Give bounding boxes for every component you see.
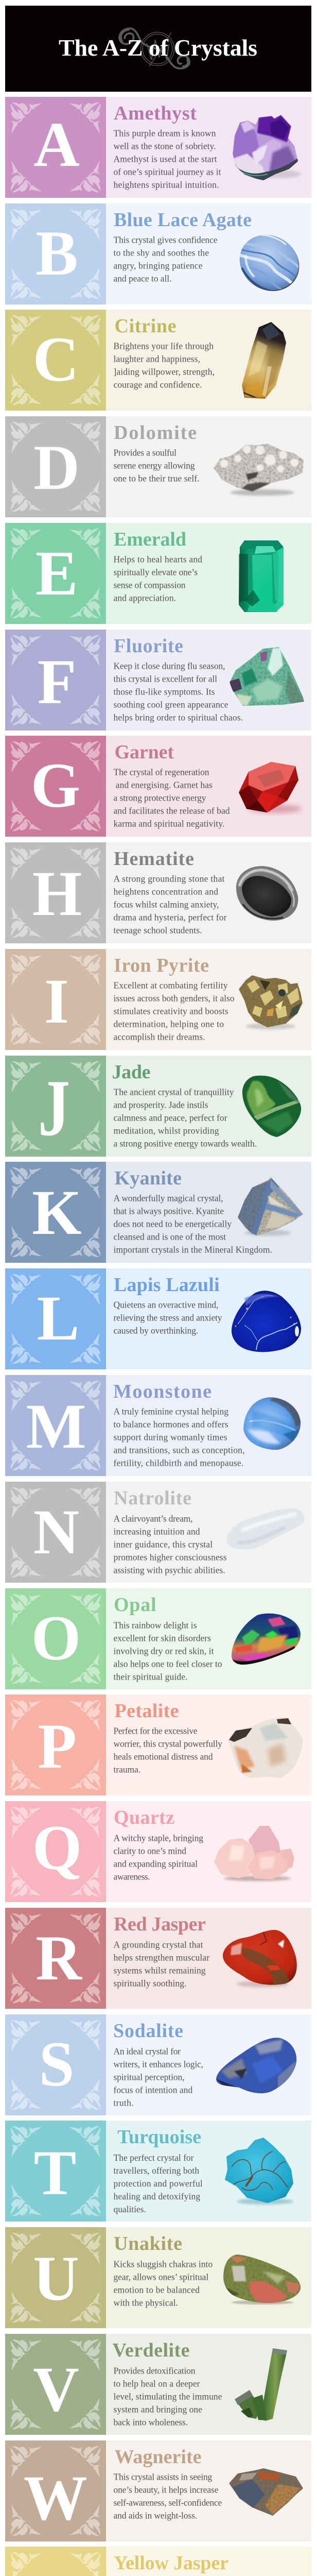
description: Excellent at combating fertility <box>113 980 228 990</box>
card: Turquoise <box>5 2121 311 2222</box>
description: ]aiding willpower, strength, <box>113 367 215 377</box>
description: serene energy allowing <box>113 461 195 471</box>
ornament corners <box>11 635 100 725</box>
letter K: K <box>32 1177 82 1248</box>
crystal name: Lapis Lazuli <box>114 1274 219 1296</box>
card: Wagnerite <box>5 2441 311 2541</box>
card: Emerald <box>5 523 311 624</box>
description: Kicks sluggish chakras into <box>113 2259 213 2269</box>
letter O: O <box>31 1603 81 1673</box>
description: gear, allows ones’ spiritual <box>113 2272 208 2282</box>
ornament corners <box>11 2446 100 2536</box>
description <box>113 1193 272 1255</box>
description: writers, it enhances logic, <box>113 2059 203 2069</box>
letter U: U <box>33 2243 79 2314</box>
ornament corners <box>11 1274 100 1364</box>
description: courage and confidence. <box>113 379 202 389</box>
description: those flu-like symptoms. Its <box>113 686 215 697</box>
crystal name: Petalite <box>114 1700 179 1722</box>
description <box>113 128 221 190</box>
icon: blue lace agate <box>240 235 300 291</box>
description: karma and spiritual negativity. <box>113 818 224 828</box>
description <box>113 1406 245 1468</box>
card: Verdelite <box>5 2334 311 2435</box>
description: calmness and peace, perfect for <box>113 1113 227 1123</box>
card: Lapis Lazuli <box>5 1268 311 1369</box>
description: cleansed and is one of the most <box>113 1231 226 1242</box>
description: healing and detoxifying <box>113 2191 200 2201</box>
description: trauma. <box>113 1764 140 1774</box>
ornament corners <box>11 2126 100 2216</box>
description: sense of compassion <box>113 580 186 590</box>
description: well as the stone of sobriety. <box>113 141 216 151</box>
ornament corners <box>11 2340 100 2429</box>
description: determination, helping one to <box>113 1019 224 1029</box>
description <box>113 2259 213 2308</box>
description: support during womanly times <box>113 1432 227 1443</box>
description: worrier, this crystal powerfully <box>113 1738 222 1749</box>
letter R: R <box>36 1923 82 1993</box>
description: A witchy staple, bringing <box>113 1833 203 1843</box>
card: Natrolite <box>5 1482 311 1583</box>
crystal name: Opal <box>114 1594 156 1616</box>
letter C: C <box>33 324 79 395</box>
description: A truly feminine crystal helping <box>113 1406 228 1417</box>
icon: verdelite crystals <box>235 2348 287 2421</box>
header logo watermark <box>119 28 189 69</box>
description: protection and powerful <box>113 2178 203 2189</box>
crystal name: Quartz <box>114 1807 174 1828</box>
description: Perfect for the excessive <box>113 1726 198 1736</box>
description <box>113 2472 222 2520</box>
ornament corners <box>11 1913 100 2003</box>
description: clarity to one’s mind <box>113 1845 186 1856</box>
icon: jade stone <box>242 1076 301 1137</box>
icon: amethyst cluster <box>233 115 301 182</box>
letter M: M <box>26 1391 86 1462</box>
description: to the shy and soothes the <box>113 247 209 258</box>
description: and transitions, such as conception, <box>113 1445 245 1455</box>
description: heals emotional distress and <box>113 1752 213 1762</box>
letter J: J <box>38 1063 70 1153</box>
card: Fluorite <box>5 630 311 731</box>
description <box>113 1087 257 1149</box>
description <box>113 1939 209 1989</box>
description: level, stimulating the immune <box>113 2392 222 2402</box>
ornament corners <box>11 1807 100 1896</box>
description: accomplish their dreams. <box>113 1031 205 1042</box>
description: caused by overthinking. <box>113 1325 198 1335</box>
icon: petalite rock <box>228 1717 303 1778</box>
card: Hematite <box>5 842 311 943</box>
description: important crystals in the Mineral Kingdom. <box>113 1245 272 1255</box>
card: Jade <box>5 1056 311 1157</box>
description <box>113 2366 222 2428</box>
crystal name: Fluorite <box>114 635 183 657</box>
icon: citrine crystal <box>242 322 286 399</box>
description: a strong positive energy towards wealth. <box>113 1139 257 1149</box>
description: back into wholeness. <box>113 2417 188 2428</box>
crystal name: Iron Pyrite <box>114 955 209 976</box>
description <box>113 980 235 1042</box>
ornament corners <box>11 2233 100 2323</box>
description: spiritually soothing. <box>113 1978 186 1989</box>
crystal name: Natrolite <box>114 1487 191 1509</box>
crystal name: Kyanite <box>114 1167 182 1189</box>
description: meditation, whilst providing <box>113 1125 219 1136</box>
description: of one’s spiritual journey as it <box>113 167 221 177</box>
description: helps strengthen muscular <box>113 1953 209 1963</box>
ornament corners <box>11 2020 100 2110</box>
ornament corners <box>11 315 100 405</box>
description: drama and hysteria, perfect for <box>113 912 227 922</box>
ornament corners <box>11 741 100 831</box>
description: and energising. Garnet has <box>116 780 213 790</box>
card: Red Jasper <box>5 1908 311 2009</box>
description <box>113 1514 227 1575</box>
description: one to be their true self. <box>113 473 200 483</box>
description: this crystal is excellent for all <box>113 674 217 684</box>
card: Unakite <box>5 2227 311 2328</box>
card: Citrine <box>5 310 311 411</box>
crystal name: Sodalite <box>113 2020 183 2042</box>
icon: lapis lazuli <box>232 1291 301 1352</box>
letter V: V <box>33 2354 79 2425</box>
letter H: H <box>32 858 82 929</box>
icon: fluorite rock <box>230 647 305 706</box>
description: and expanding spiritual <box>113 1859 198 1869</box>
description: This crystal assists in seeing <box>113 2472 213 2482</box>
description: excellent for skin disorders <box>113 1633 211 1643</box>
letter S: S <box>39 2029 74 2099</box>
description: issues across both genders, it also <box>113 993 235 1004</box>
card: Sodalite <box>5 2014 311 2115</box>
description <box>113 235 218 283</box>
description: Keep it close during flu season, <box>113 660 225 671</box>
description: emotion to be balanced <box>113 2284 200 2295</box>
ornament corners <box>11 2552 100 2576</box>
card: Kyanite <box>5 1162 311 1263</box>
ornament corners <box>11 1381 100 1470</box>
card: Amethyst <box>5 97 311 198</box>
description: systems whilst remaining <box>113 1965 206 1975</box>
crystal name: Yellow Jasper <box>114 2552 228 2574</box>
crystal name: Moonstone <box>113 1381 212 1402</box>
ornament corners <box>11 1487 100 1577</box>
letter F: F <box>38 647 76 717</box>
description <box>113 447 200 483</box>
crystal name: Dolomite <box>114 422 197 444</box>
description: their spiritual guide. <box>113 1671 187 1682</box>
description: A strong grounding stone that <box>113 874 225 884</box>
description: Amethyst is used at the start <box>113 154 217 164</box>
crystal name: Garnet <box>114 741 174 763</box>
description <box>113 767 230 828</box>
description: Quietens an overactive mind, <box>113 1299 218 1310</box>
card: Iron Pyrite <box>5 949 311 1050</box>
crystal name: Jade <box>112 1061 150 1083</box>
icon: rose quartz <box>214 1826 294 1881</box>
description <box>113 2153 203 2214</box>
letter B: B <box>36 218 78 289</box>
description <box>113 1620 222 1682</box>
description: to help heal on a deeper <box>113 2378 200 2388</box>
description: This purple dream is known <box>113 128 216 138</box>
icon: dolomite rock <box>214 444 304 496</box>
description: with the physical. <box>113 2298 178 2308</box>
description: to balance hormones and offers <box>113 1419 228 1429</box>
description <box>113 874 227 936</box>
crystal name: Amethyst <box>114 103 197 124</box>
crystal name: Citrine <box>114 315 176 337</box>
ornament corners <box>11 529 100 618</box>
description <box>113 660 243 722</box>
description: spiritually elevate one’s <box>113 567 198 577</box>
description: A grounding crystal that <box>113 1939 203 1950</box>
crystal name: Turquoise <box>117 2126 201 2148</box>
description: heightens spiritual intuition. <box>113 179 219 190</box>
description: stimulates creativity and boosts <box>113 1006 228 1016</box>
letter G: G <box>31 750 80 821</box>
description: one’s beauty, it helps increase <box>113 2484 219 2495</box>
card: Quartz <box>5 1801 311 1902</box>
ornament corners <box>11 1061 100 1151</box>
description: Provides a soulful <box>113 447 177 457</box>
card: Petalite <box>5 1694 311 1795</box>
description: and peace to all. <box>113 273 172 283</box>
description: fertility, childbirth and menopause. <box>113 1458 243 1468</box>
ornament corners <box>11 1700 100 1790</box>
ornament corners <box>11 422 100 512</box>
card: Blue Lace Agate <box>5 204 311 304</box>
icon: turquoise nugget <box>225 2138 293 2205</box>
icon: garnet gem <box>239 762 302 813</box>
description: Provides detoxification <box>113 2366 196 2376</box>
description: truth. <box>113 2098 134 2108</box>
icon: sodalite <box>216 2038 296 2093</box>
card: Dolomite <box>5 416 311 517</box>
description <box>113 341 215 389</box>
description <box>113 1726 222 1774</box>
description <box>113 2046 203 2108</box>
letter Q: Q <box>32 1812 82 1883</box>
description: travellers, offering both <box>113 2165 199 2176</box>
icon: wagnerite rock <box>229 2468 303 2516</box>
description: This crystal gives confidence <box>113 235 218 245</box>
ornament corners <box>11 1167 100 1257</box>
crystal name: Wagnerite <box>114 2446 202 2468</box>
description: and appreciation. <box>113 592 176 603</box>
description: focus of intention and <box>113 2084 192 2095</box>
description: also helps one to feel closer to <box>113 1659 222 1669</box>
description: relieving the stress and anxiety <box>113 1313 222 1323</box>
description <box>113 1833 203 1882</box>
crystal name: Verdelite <box>112 2340 189 2361</box>
letter D: D <box>33 432 80 503</box>
icon: emerald gem <box>239 540 284 612</box>
description: self-awareness, self-confidence <box>113 2498 222 2508</box>
crystal name: Red Jasper <box>114 1913 206 1935</box>
crystal name: Unakite <box>114 2233 182 2255</box>
description: focus whilst calming anxiety, <box>113 900 219 910</box>
letter E: E <box>36 538 78 608</box>
description: system and bringing one <box>113 2404 202 2414</box>
ornament corners <box>11 1594 100 1684</box>
crystal name: Hematite <box>114 848 194 870</box>
card: Moonstone <box>5 1375 311 1476</box>
crystal name: Emerald <box>114 529 186 550</box>
ornament corners <box>11 848 100 938</box>
title: The A-Z of Crystals <box>59 35 257 61</box>
description: Brightens your life through <box>113 341 214 351</box>
description: awareness. <box>113 1871 150 1882</box>
description: promotes higher consciousness <box>113 1552 227 1562</box>
icon: opal <box>232 1614 301 1666</box>
letter A: A <box>33 109 80 180</box>
description: increasing intuition and <box>113 1526 200 1536</box>
description: The ancient crystal of tranquillity <box>113 1087 234 1097</box>
description: A wonderfully magical crystal, <box>113 1193 223 1204</box>
description: that is always positive. Kyanite <box>113 1206 224 1216</box>
letter I: I <box>44 966 69 1037</box>
letter P: P <box>38 1711 77 1782</box>
description: Helps to heal hearts and <box>113 554 202 565</box>
description: spiritual perception, <box>113 2072 184 2082</box>
icon: hematite stone <box>236 866 298 921</box>
icon: natrolite <box>226 1509 304 1550</box>
letter N: N <box>33 1497 79 1567</box>
icon: moonstone <box>243 1397 302 1450</box>
ornament corners <box>11 955 100 1044</box>
description: inner guidance, this crystal <box>113 1539 213 1550</box>
description: involving dry or red skin, it <box>113 1646 214 1656</box>
description: The perfect crystal for <box>113 2153 194 2163</box>
description: a strong protective energy <box>113 792 206 803</box>
description: soothing cool green appearance <box>113 700 228 710</box>
icon: unakite <box>223 2255 301 2304</box>
description: angry, bringing patience <box>113 261 203 271</box>
description: The crystal of regeneration <box>113 767 209 777</box>
description: does not need to be energetically <box>113 1219 232 1229</box>
icon: iron pyrite <box>239 975 303 1029</box>
icon: kyanite rock <box>238 1177 303 1236</box>
description: and prosperity. Jade instils <box>113 1099 208 1110</box>
ornament corners <box>11 103 100 192</box>
ornament corners <box>11 209 100 299</box>
description: heightens concentration and <box>113 886 218 896</box>
letter L: L <box>37 1283 79 1353</box>
description <box>113 1299 222 1335</box>
description: assisting with psychic abilities. <box>113 1565 225 1575</box>
header banner <box>5 6 311 92</box>
description: teenage school students. <box>113 925 202 936</box>
letter T: T <box>34 2138 76 2208</box>
card: Opal <box>5 1588 311 1689</box>
description: laughter and happiness, <box>113 353 200 364</box>
crystal name: Blue Lace Agate <box>114 209 252 231</box>
card: Yellow Jasper <box>5 2547 311 2576</box>
description <box>113 554 202 603</box>
card: Garnet <box>5 736 311 837</box>
description: helps bring order to spiritual chaos. <box>113 712 243 722</box>
description: A clairvoyant’s dream, <box>113 1514 192 1524</box>
description: An ideal crystal for <box>113 2046 181 2057</box>
description: and aids in weight-loss. <box>113 2510 197 2520</box>
icon: red jasper <box>223 1930 297 1987</box>
description: This rainbow delight is <box>113 1620 197 1630</box>
description: qualities. <box>113 2204 146 2214</box>
description: and facilitates the release of bad <box>113 806 230 816</box>
letter W: W <box>24 2463 87 2533</box>
